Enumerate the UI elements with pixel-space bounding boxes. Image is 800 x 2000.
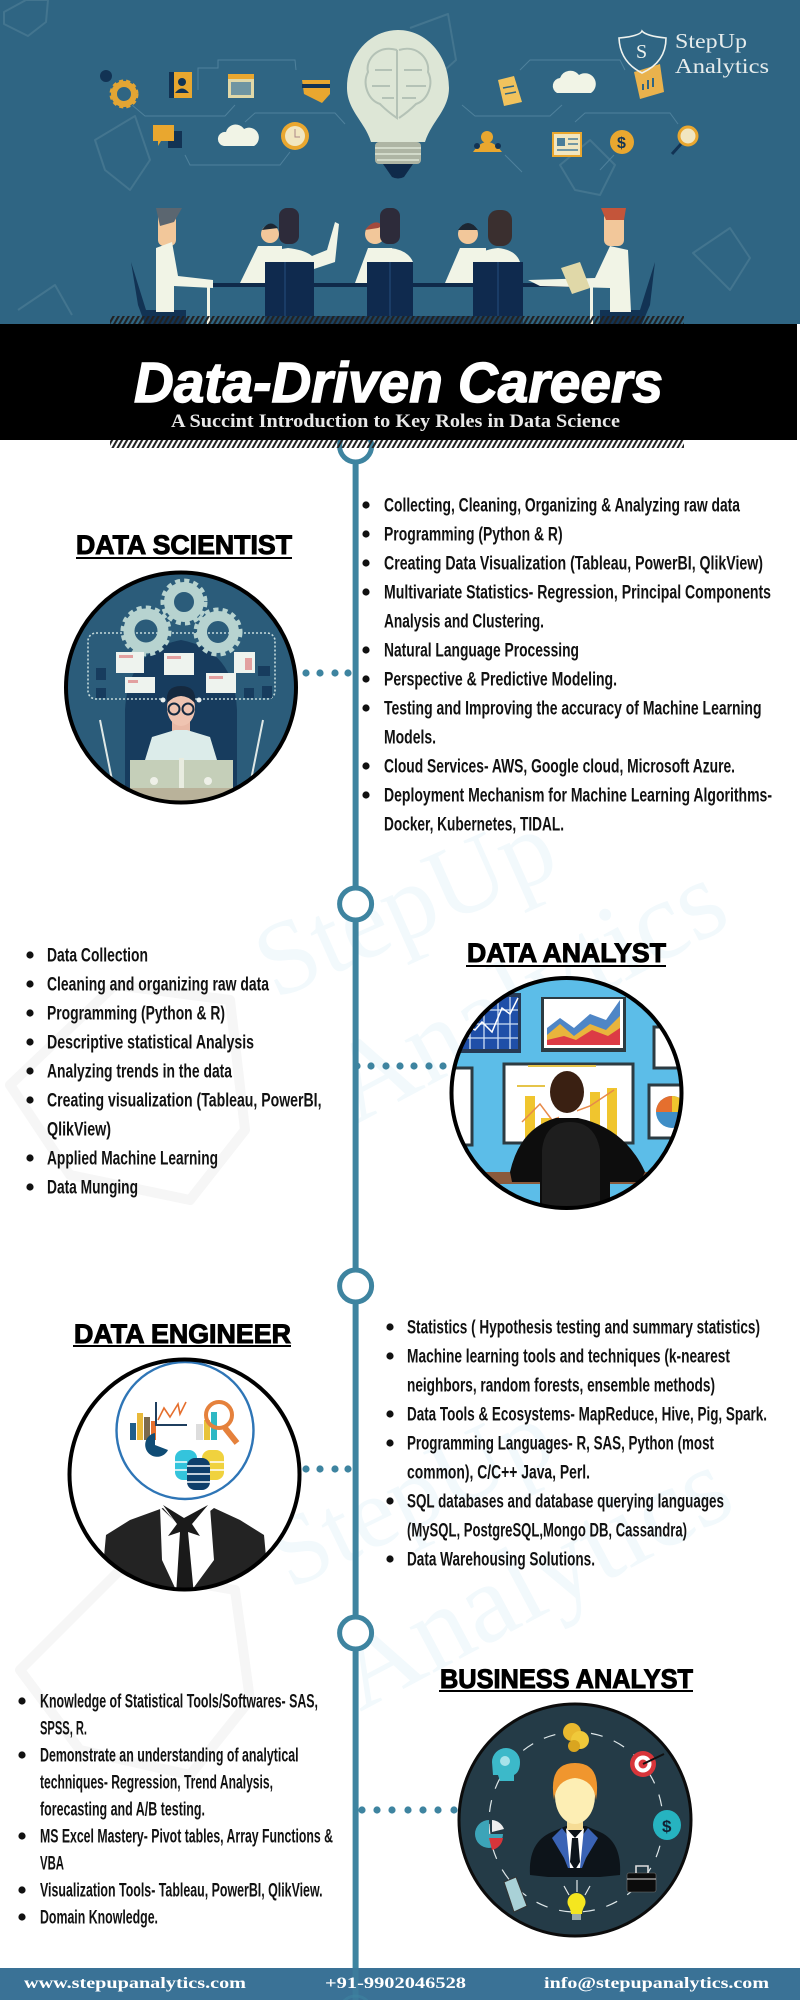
skills list: data scientist: Natural Language Processing	[384, 640, 579, 662]
skills list: data scientist: Perspective & Predictive Modeling.	[384, 670, 617, 690]
skills list: business analyst: SPSS, R.	[40, 1718, 87, 1740]
website: www.stepupanalytics.com	[24, 1975, 247, 1992]
heading: data engineer: DATA ENGINEER	[74, 1319, 291, 1349]
skills list: data analyst: Cleaning and organizing raw data	[47, 974, 269, 996]
skills list: data scientist: Programming (Python & R)	[384, 524, 563, 546]
skills list: business analyst: Visualization Tools- Tableau, PowerBI, QlikView.	[40, 1880, 323, 1902]
skills list: data engineer: common), C/C++ Java, Perl.	[407, 1462, 590, 1484]
timeline node 1	[340, 430, 372, 462]
icon: data analyst portrait	[450, 978, 688, 1210]
skills list: data analyst: Data Collection	[47, 946, 148, 966]
skills list: data scientist: Models.	[384, 728, 436, 748]
timeline node 2	[340, 888, 372, 920]
skills list: business analyst: forecasting and A/B testing.	[40, 1800, 205, 1820]
logo: Analytics	[675, 54, 769, 78]
icon: business analyst portrait	[459, 1704, 691, 1936]
right person	[528, 208, 632, 324]
title band	[0, 324, 797, 440]
skills list: data engineer	[386, 1318, 767, 1570]
banner illustration	[0, 0, 800, 324]
charts and databases	[130, 1402, 237, 1490]
email: info@stepupanalytics.com	[544, 1975, 770, 1992]
circuit connectors	[132, 60, 678, 172]
skills list: business analyst: techniques- Regression, Trend Analysis,	[40, 1772, 273, 1794]
skills list: data analyst: QlikView)	[47, 1120, 111, 1140]
icon: data engineer portrait	[70, 1360, 300, 1600]
icon: data scientist portrait	[66, 572, 296, 808]
icon row two	[153, 122, 697, 156]
connector dots	[353, 1062, 447, 1070]
panel: data analyst	[26, 938, 688, 1210]
connector dots	[358, 1806, 458, 1814]
icon row one	[100, 64, 664, 107]
skills list: data analyst: Applied Machine Learning	[47, 1148, 218, 1170]
central figure	[530, 1763, 620, 1877]
panel: data scientist	[66, 496, 772, 836]
skills list: data scientist: Docker, Kubernetes, TIDAL.	[384, 814, 564, 836]
hatched stripes	[110, 316, 684, 448]
logo	[619, 29, 769, 78]
title: Data-Driven Careers	[134, 351, 663, 415]
team meeting scene	[131, 208, 655, 324]
subtitle: A Succint Introduction to Key Roles in Data Science	[171, 411, 620, 432]
background watermarks: Analytics	[314, 1423, 751, 1734]
connector dots	[302, 1465, 352, 1473]
logo: S	[636, 41, 647, 63]
skills list: data scientist: Analysis and Clustering.	[384, 612, 544, 632]
panel: data engineer	[70, 1318, 767, 1600]
left person	[156, 208, 213, 324]
skills list: data analyst: Data Munging	[47, 1178, 138, 1198]
faint background shields	[4, 0, 750, 315]
background watermarks: StepUp	[251, 1378, 569, 1610]
logo: StepUp	[675, 29, 747, 53]
orbit icons	[475, 1723, 681, 1920]
orbit icons: $	[662, 1817, 672, 1836]
skills list: business analyst	[18, 1692, 333, 1928]
skills list: business analyst: VBA	[40, 1854, 64, 1874]
seated back group	[240, 208, 523, 324]
skills list: business analyst: Knowledge of Statistical Tools/Softwares- SAS,	[40, 1692, 318, 1712]
panel: business analyst	[18, 1664, 693, 1936]
skills list: data analyst: Descriptive statistical Analysis	[47, 1032, 254, 1054]
skills list: data analyst	[26, 946, 322, 1198]
footer bar	[0, 1968, 800, 2000]
connector dots	[302, 669, 352, 677]
skills list: data scientist	[362, 496, 772, 836]
skills list: data analyst: Analyzing trends in the data	[47, 1062, 232, 1082]
timeline node 3	[340, 1270, 372, 1302]
timeline node 4	[340, 1617, 372, 1649]
background watermarks	[10, 786, 751, 1775]
skills list: data analyst: Programming (Python & R)	[47, 1004, 225, 1024]
heading: data scientist: DATA SCIENTIST	[76, 530, 292, 560]
heading: data analyst: DATA ANALYST	[467, 938, 666, 968]
skills list: data analyst: Creating visualization (Tableau, PowerBI,	[47, 1090, 322, 1112]
bulb with brain	[347, 30, 449, 178]
skills list: business analyst: Domain Knowledge.	[40, 1908, 158, 1928]
background watermarks: Analytics	[309, 836, 746, 1147]
skills list: business analyst: MS Excel Mastery- Pivot tables, Array Functions &	[40, 1826, 333, 1848]
skills list: business analyst: Demonstrate an understanding of analytical	[40, 1746, 299, 1766]
background watermarks: StepUp	[237, 786, 572, 1021]
skills list: data engineer: Data Warehousing Solutions.	[407, 1550, 595, 1570]
phone: +91-9902046528	[325, 1975, 466, 1992]
icon row two: $	[617, 135, 626, 152]
heading: business analyst: BUSINESS ANALYST	[440, 1664, 693, 1694]
timeline vertical line	[353, 446, 359, 2000]
